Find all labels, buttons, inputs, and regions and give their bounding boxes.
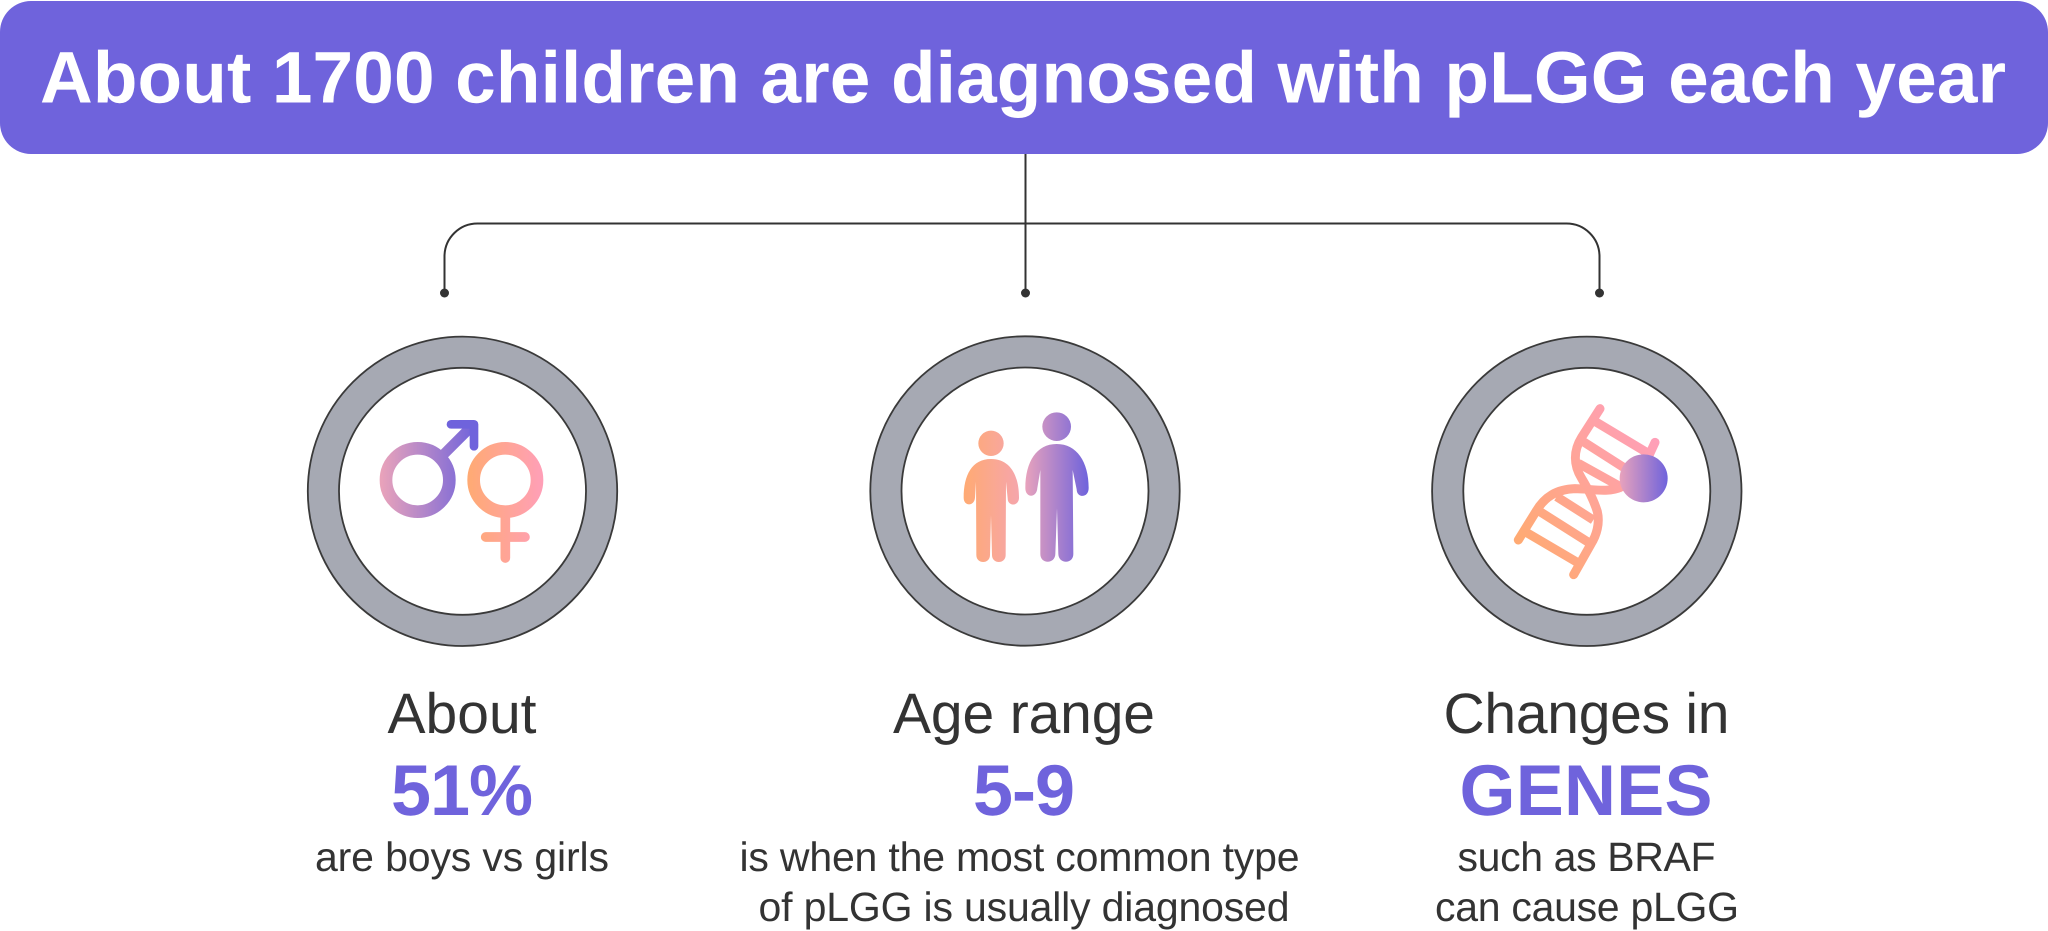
text block: boys statistic (315, 682, 609, 880)
connector bracket (440, 154, 1604, 298)
text block: genes statistic (1435, 682, 1739, 930)
text block: boys statistic: 51% (391, 751, 533, 831)
text block: age statistic: is when the most common type (740, 834, 1300, 880)
ring (323, 352, 602, 630)
icon: child and adult figures (964, 412, 1089, 562)
panel: gender (308, 337, 617, 646)
panel: genes (1432, 337, 1742, 646)
text block: age statistic: Age range (893, 682, 1155, 746)
text block: genes statistic: Changes in (1444, 682, 1730, 746)
title banner (0, 1, 2048, 154)
text block: boys statistic: are boys vs girls (315, 834, 609, 880)
text block: genes statistic: such as BRAF (1458, 834, 1716, 880)
text block: genes statistic: GENES (1460, 751, 1712, 831)
ring (1448, 352, 1726, 630)
text block: genes statistic: can cause pLGG (1435, 884, 1739, 930)
text block: boys statistic: About (388, 682, 537, 746)
panel: age (870, 336, 1180, 646)
text block: age statistic (740, 682, 1300, 930)
ring (886, 352, 1164, 630)
text block: age statistic: 5-9 (973, 751, 1075, 831)
text block: age statistic: of pLGG is usually diagnosed (758, 884, 1290, 930)
icon: DNA helix with marker (1518, 409, 1668, 575)
icon: male and female symbols (386, 424, 537, 558)
title: About 1700 children are diagnosed with pLGG each year (40, 38, 2006, 118)
